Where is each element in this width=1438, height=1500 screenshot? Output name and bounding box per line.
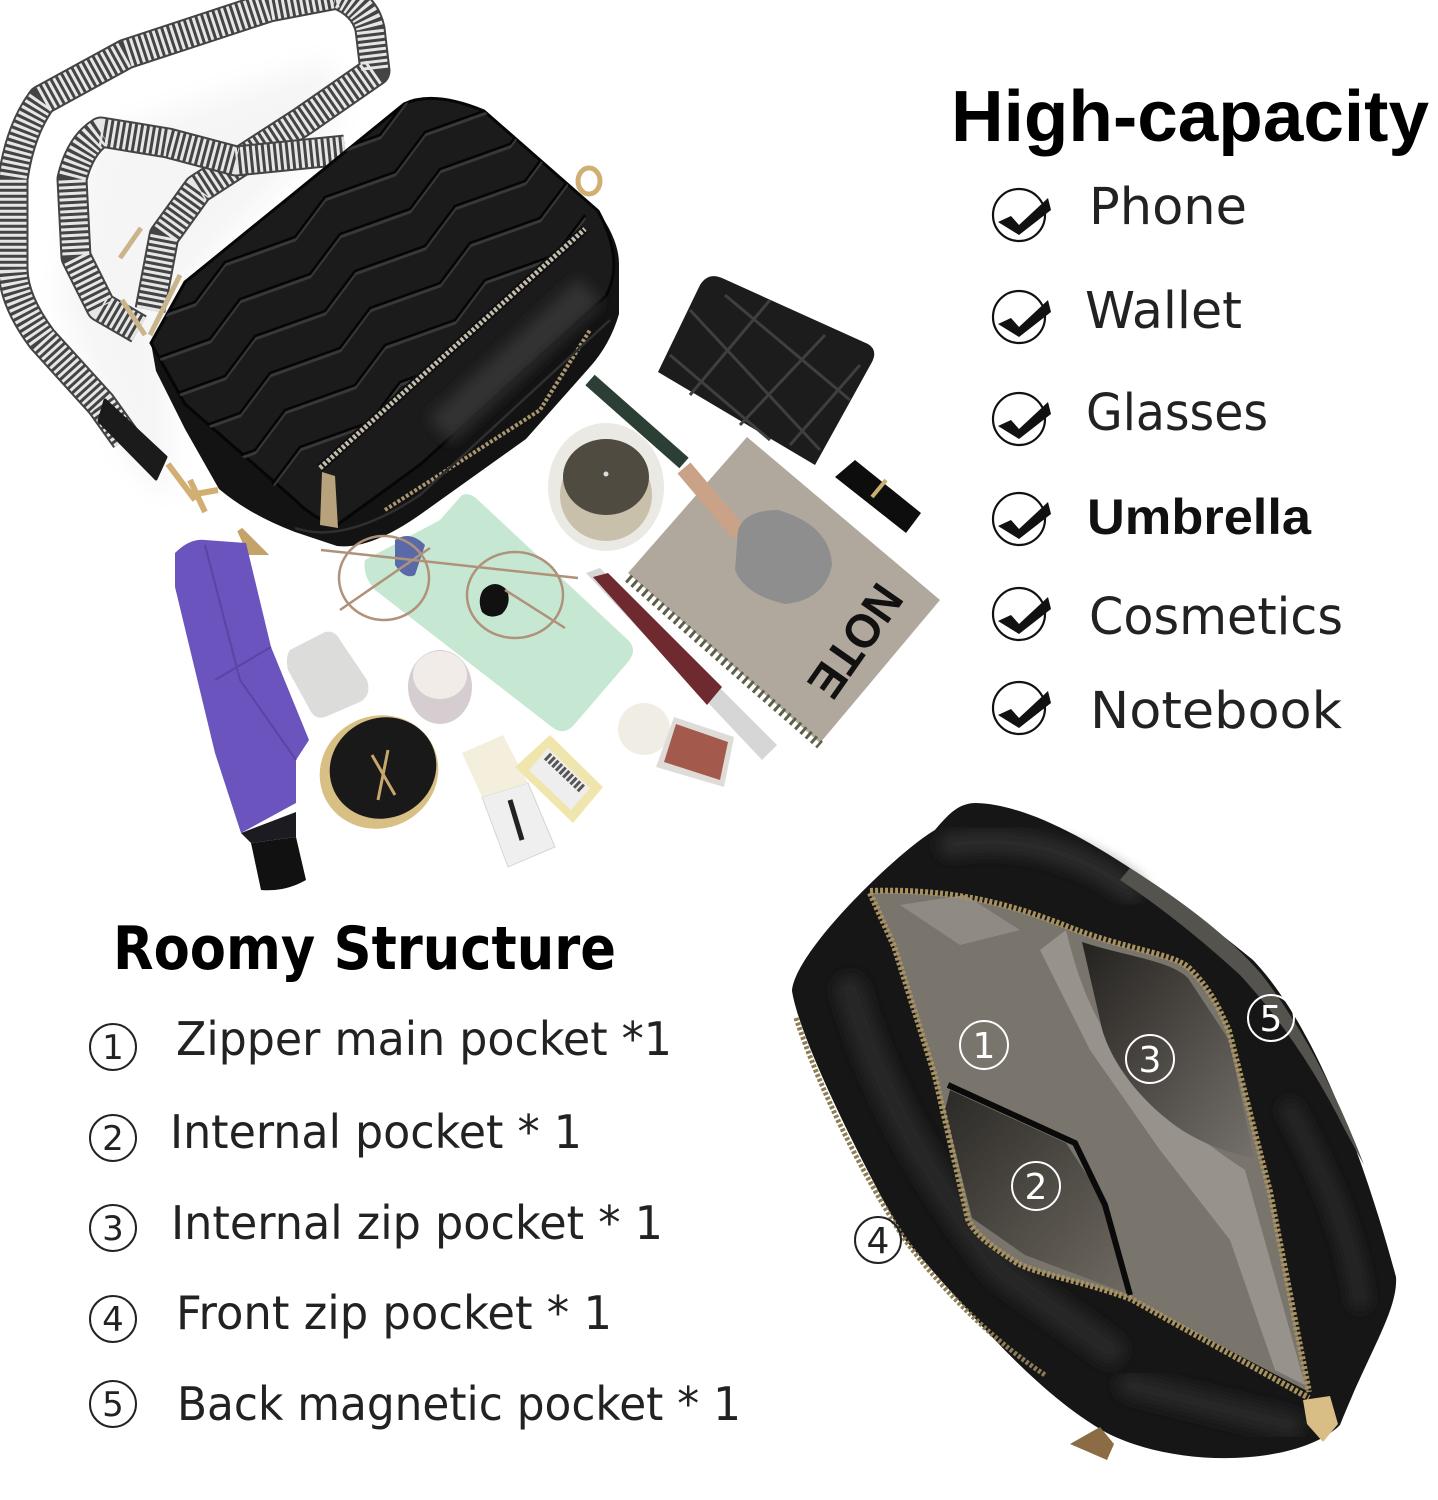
list item: pocket 1: 1 <box>102 1028 124 1068</box>
checklist: contents <box>993 178 1343 741</box>
open bag showing pockets <box>792 803 1396 1460</box>
icon: NOTE notebook <box>628 437 940 745</box>
icon: mint phone <box>364 494 633 731</box>
zipper pull: main <box>1303 1396 1338 1442</box>
back pocket gray lining <box>1120 868 1364 1165</box>
list item: Wallet <box>993 282 1242 343</box>
list item: pocket 5: 5 <box>102 1385 124 1425</box>
list item: pocket 1: Zipper main pocket *1 <box>176 1012 672 1066</box>
icon: red nail polish <box>618 703 734 787</box>
list item: Umbrella <box>993 489 1312 545</box>
bag interior lining <box>870 893 1309 1392</box>
list item: Phone <box>993 178 1247 241</box>
list item: pocket 2: Internal pocket * 1 <box>170 1105 582 1159</box>
list item: Wallet: Wallet <box>1085 282 1242 341</box>
icon: makeup brush <box>684 468 832 604</box>
marker 4: 4 <box>867 1221 889 1262</box>
icon: eyebrow cream jar <box>548 423 664 551</box>
top shadow lining <box>900 895 1020 945</box>
list item: pocket 4: 4 <box>102 1300 124 1340</box>
pocket 2 dark interior <box>945 1090 1131 1295</box>
title: High-capacity: High-capacity <box>951 77 1429 157</box>
icon: black quilted crossbody bag <box>149 96 619 555</box>
icon: NOTE notebook: NOTE <box>797 574 912 707</box>
marker 2: 2 <box>1025 1167 1047 1208</box>
list item: Notebook: Notebook <box>1090 682 1342 741</box>
heading: Roomy Structure: Roomy Structure <box>113 914 616 984</box>
list item: Umbrella: Umbrella <box>1087 489 1312 545</box>
icon: brush handle <box>590 380 684 463</box>
icon: lip gloss <box>586 568 777 760</box>
list item: pocket 3: 3 <box>102 1209 124 1249</box>
list item: pocket 5: Back magnetic pocket * 1 <box>177 1377 741 1431</box>
zipper pull: front <box>1070 1427 1114 1460</box>
icon: lipstick <box>835 460 921 533</box>
list item: pocket 3: Internal zip pocket * 1 <box>171 1196 663 1250</box>
zipper main bottom <box>870 893 1309 1398</box>
icon: clear nail bottle <box>462 735 555 867</box>
marker 2 <box>1012 1162 1060 1210</box>
marker 1: 1 <box>973 1026 995 1067</box>
icon: purple umbrella <box>175 540 309 890</box>
icon: YSL cushion compact <box>301 696 457 848</box>
list item: pocket 4: Front zip pocket * 1 <box>176 1286 612 1340</box>
marker 4 <box>855 1217 901 1263</box>
icon: white earbud case <box>287 632 368 718</box>
list item: Glasses <box>993 384 1268 445</box>
bag outer shell <box>792 803 1396 1458</box>
leather highlights <box>850 842 1360 1425</box>
icon: round glasses <box>321 536 578 638</box>
icon: pink jar <box>408 650 472 724</box>
pocket 2 black trim <box>948 1085 1130 1295</box>
list item: Phone: Phone <box>1089 178 1247 237</box>
list item: pocket 2: 2 <box>102 1119 124 1159</box>
marker 3 <box>1126 1035 1174 1083</box>
list item: Cosmetics: Cosmetics <box>1089 588 1343 647</box>
light ridge lining <box>1040 930 1305 1385</box>
marker 3: 3 <box>1139 1040 1161 1081</box>
zipper main top <box>870 891 1309 1392</box>
icon: patterned shoulder strap <box>13 0 375 512</box>
list item: Glasses: Glasses <box>1086 384 1268 443</box>
list: pocket structure <box>90 1012 741 1431</box>
icon: barcode tag <box>515 735 603 823</box>
pocket 3 dark interior <box>1082 942 1254 1158</box>
marker 5: 5 <box>1260 999 1282 1040</box>
soft photo shadow <box>60 60 340 500</box>
zipper front pocket <box>796 1018 1045 1375</box>
marker 1 <box>960 1021 1008 1069</box>
marker 5 <box>1248 995 1294 1041</box>
icon: quilted wallet <box>658 276 874 465</box>
